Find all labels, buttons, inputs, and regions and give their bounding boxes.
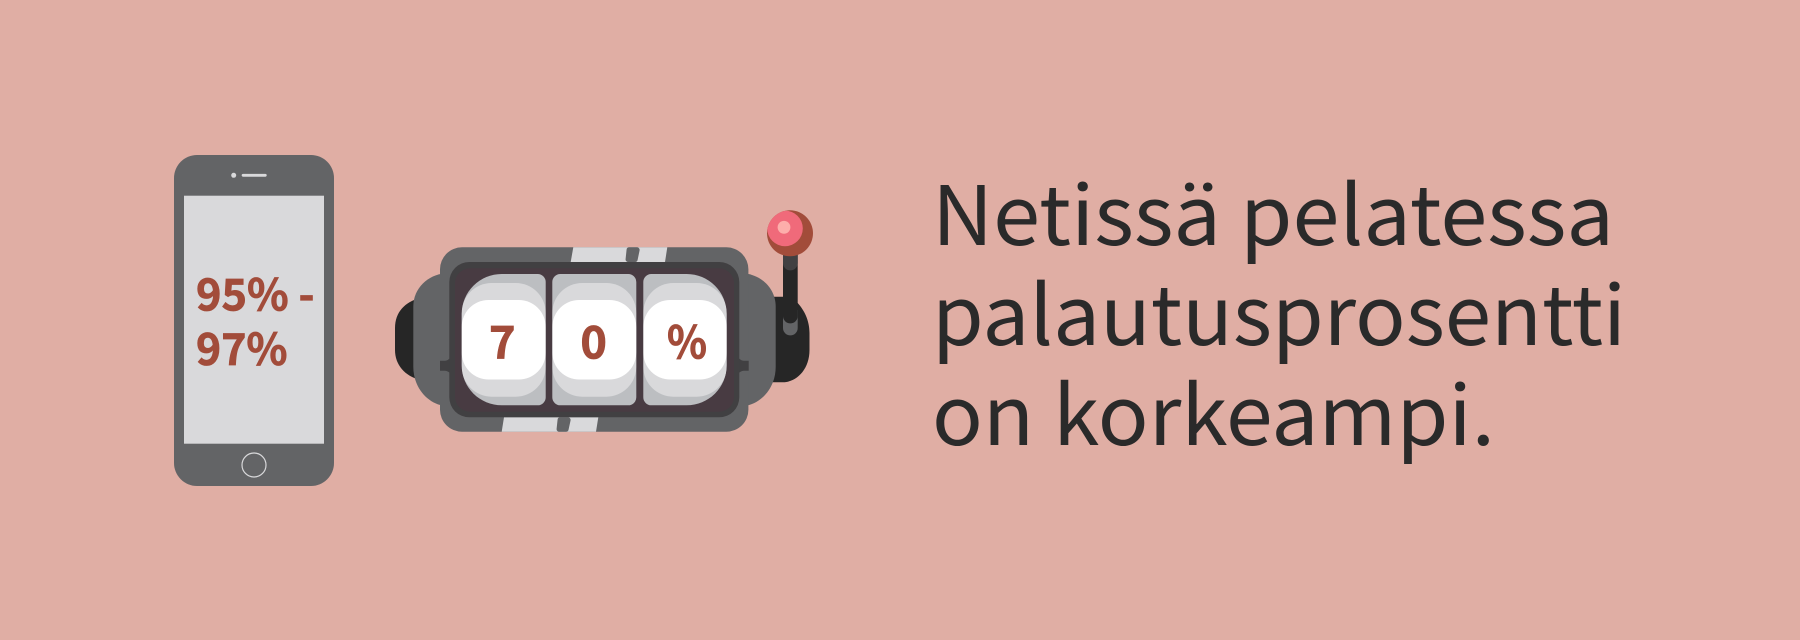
reel window background — [455, 268, 734, 412]
right notch — [738, 357, 749, 374]
lever ball shine — [778, 221, 790, 234]
icon: slot machine — [395, 210, 813, 432]
icon: smartphone — [174, 155, 334, 486]
phone home button — [242, 453, 266, 477]
bottom stripe divider — [557, 417, 571, 432]
headline text: palautusprosentti — [932, 250, 1626, 369]
left black side cap — [395, 298, 420, 380]
headline text: on korkeampi. — [932, 350, 1495, 469]
phone payout percentage text: 97% — [196, 314, 288, 378]
right black side cap — [770, 297, 810, 382]
reel 3 percent sign: % — [667, 306, 707, 371]
top stripe divider — [626, 247, 640, 262]
lever ball pink highlight — [767, 211, 803, 246]
reel window outer frame — [449, 262, 739, 417]
bottom light stripe — [502, 417, 598, 432]
reel 2 digit: 0 — [580, 306, 607, 371]
reel 2 — [552, 274, 636, 405]
phone screen — [184, 196, 324, 444]
top light stripe — [571, 247, 667, 262]
machine body — [440, 247, 748, 432]
lever — [767, 210, 813, 335]
reel 1 digit: 7 — [489, 306, 516, 371]
phone speaker — [242, 174, 267, 177]
left notch — [440, 357, 451, 374]
lever base — [783, 310, 798, 335]
reel 3 — [643, 274, 727, 405]
lever stick — [783, 250, 798, 323]
phone body — [174, 155, 334, 486]
reel 1 — [462, 274, 546, 405]
machine side bulges — [413, 273, 776, 406]
phone camera — [231, 173, 236, 178]
lever ball — [767, 210, 813, 256]
headline text: Netissä pelatessa — [932, 150, 1614, 269]
infographic canvas — [174, 155, 1620, 486]
phone payout percentage text — [196, 260, 314, 378]
lever collar — [783, 250, 798, 270]
headline text — [932, 150, 1626, 469]
phone payout percentage text: 95% - — [196, 260, 314, 324]
